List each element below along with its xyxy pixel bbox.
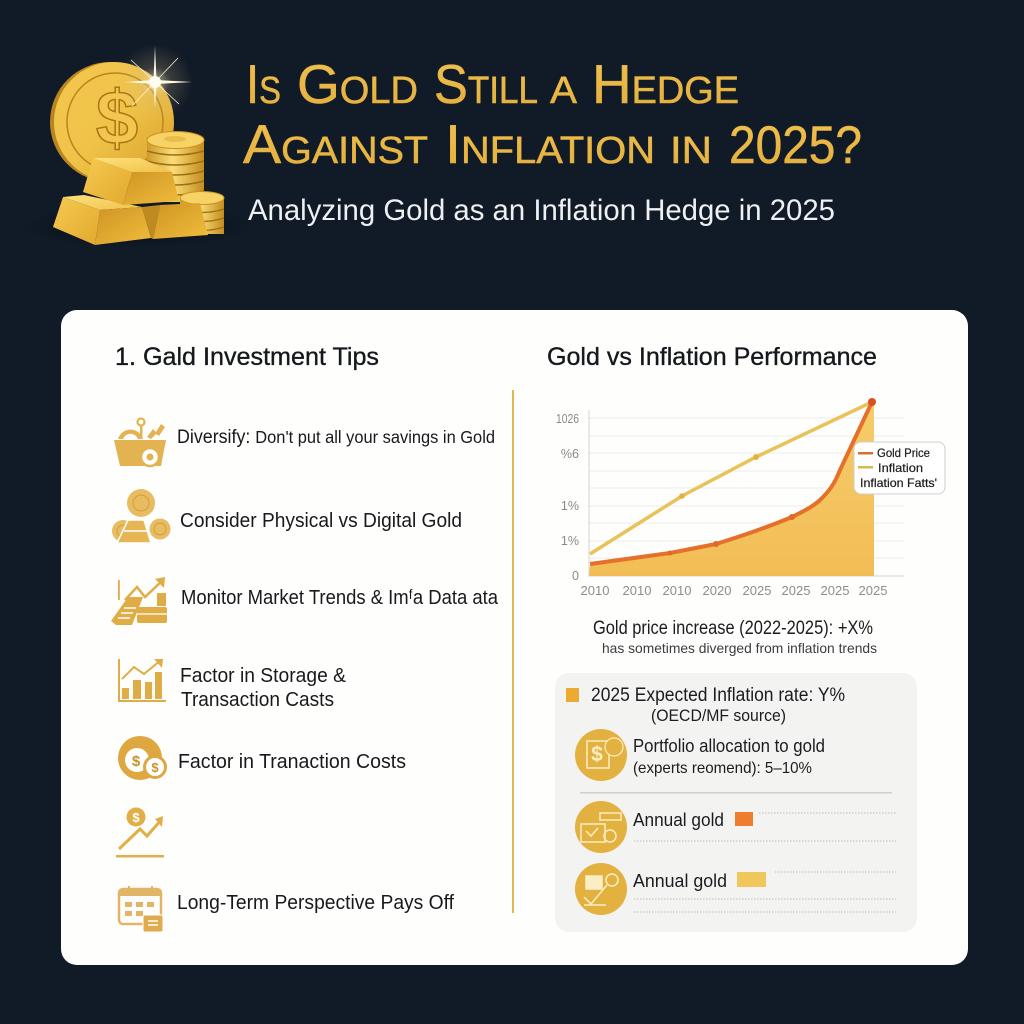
x axis labels: 2010 xyxy=(623,583,651,598)
chart area fill xyxy=(589,402,874,576)
icon: bar chart with arrow xyxy=(119,659,166,701)
chart caption xyxy=(593,618,877,656)
icon: coin with dollar xyxy=(118,736,166,780)
stat: expected inflation: (OECD/MF source) xyxy=(651,706,786,725)
stat: annual gold yellow xyxy=(575,863,896,915)
title xyxy=(243,53,862,175)
panel: investment tips xyxy=(111,343,499,932)
tip text: storage costs: Transaction Casts xyxy=(181,689,334,711)
icon: chart and check xyxy=(575,863,627,915)
tip text: monitor trends: Monitor Market Trends & Imᶠa Data ata xyxy=(181,587,499,609)
tip text: transaction costs: Factor in Tranaction Costs xyxy=(178,751,406,773)
icon: coins and bar xyxy=(112,489,170,543)
chart legend xyxy=(854,442,945,494)
tip 3: monitor trends xyxy=(111,577,499,625)
line chart xyxy=(556,398,945,598)
tip 5: transaction costs xyxy=(118,736,406,780)
x axis labels: 2010 xyxy=(663,583,691,598)
tip 7: long-term perspective xyxy=(119,886,454,932)
icon: large dollar coin xyxy=(50,62,174,182)
column divider xyxy=(512,390,514,913)
heading: investment tips: 1. Gald Investment Tips xyxy=(115,343,379,371)
chart caption: Gold price increase (2022-2025): +X% xyxy=(593,618,873,639)
tip 1: diversify xyxy=(114,418,495,466)
stat: portfolio allocation: Portfolio allocation to gold xyxy=(633,736,825,756)
tip text: diversify: Diversify: Don't put all your savings in Gold xyxy=(177,427,495,448)
title: A xyxy=(550,70,578,112)
icon: small coin stack xyxy=(180,192,224,234)
title: 2025? xyxy=(729,116,862,175)
x axis labels: 2025 xyxy=(859,583,887,598)
tip 4: storage costs xyxy=(119,659,347,711)
icon: lower right gold bar xyxy=(142,203,208,239)
y axis labels: 1026 xyxy=(556,412,579,426)
tip text: storage costs: Factor in Storage & xyxy=(180,665,347,687)
icon: basket xyxy=(114,418,166,466)
icon: calendar xyxy=(119,886,163,932)
chart legend: Inflation Fatts' xyxy=(860,476,937,490)
y axis labels: 0 xyxy=(572,569,579,583)
stat: expected inflation: 2025 Expected Inflation rate: Y% xyxy=(591,685,845,706)
tip 6: icon only, growth with dollar: $ xyxy=(132,810,140,825)
panel: key stats xyxy=(555,673,917,932)
icon: portfolio document xyxy=(575,729,627,781)
chart legend: Inflation xyxy=(878,461,923,475)
title: GOLD xyxy=(297,53,418,115)
y axis labels: %6 xyxy=(561,447,579,461)
stat: annual gold orange xyxy=(575,801,896,853)
stat: portfolio allocation xyxy=(575,729,825,781)
tip 6: icon only, growth with dollar xyxy=(116,808,164,858)
chart caption: has sometimes diverged from inflation trends xyxy=(602,640,877,656)
x axis labels xyxy=(581,583,887,598)
x axis labels: 2025 xyxy=(743,583,771,598)
title: AGAINST xyxy=(243,113,428,175)
title: INFLATION xyxy=(445,113,655,175)
icon: check and coin xyxy=(575,801,627,853)
gold price line xyxy=(590,398,876,564)
y axis labels: 1% xyxy=(561,534,579,548)
x axis labels: 2025 xyxy=(782,583,810,598)
x axis labels: 2020 xyxy=(703,583,731,598)
title: STILL xyxy=(434,53,538,115)
main white card xyxy=(61,310,968,965)
stat: portfolio allocation: (experts reomend): 5–10% xyxy=(633,760,812,777)
icon: coin with dollar: $ xyxy=(151,760,159,775)
x axis labels: 2010 xyxy=(581,583,609,598)
icon: coin with dollar: $ xyxy=(132,753,141,770)
chart legend: Gold Price xyxy=(877,446,930,460)
tip text: long-term perspective: Long-Term Perspective Pays Off xyxy=(177,892,454,914)
icon: trend and ledger xyxy=(111,577,167,625)
stat: annual gold yellow: Annual gold xyxy=(633,871,727,891)
icon: portfolio document: $ xyxy=(591,743,603,766)
stat: expected inflation xyxy=(566,685,845,725)
stat: annual gold orange: Annual gold xyxy=(633,810,724,830)
x axis labels: 2025 xyxy=(821,583,849,598)
icon: tall coin stack xyxy=(147,132,204,202)
tip 2: physical vs digital xyxy=(112,489,462,543)
inflation line xyxy=(590,402,872,554)
title: HEDGE xyxy=(592,53,739,115)
tip text: physical vs digital: Consider Physical vs Digital Gold xyxy=(180,510,462,532)
subtitle: Analyzing Gold as an Inflation Hedge in 2025 xyxy=(248,194,835,227)
y axis labels: 1% xyxy=(561,499,579,513)
title: IS xyxy=(246,53,281,115)
y axis labels xyxy=(556,412,579,583)
hero illustration: gold coin, coin stacks and bars xyxy=(20,44,256,248)
icon: sparkle xyxy=(117,44,193,120)
title: IN xyxy=(670,130,712,172)
tip text: storage costs xyxy=(180,665,347,711)
icon: lower left gold bar xyxy=(53,195,151,245)
icon: top gold bar xyxy=(83,158,179,205)
heading: gold vs inflation: Gold vs Inflation Performance xyxy=(547,343,877,371)
icon: large dollar coin: $ xyxy=(96,76,138,161)
